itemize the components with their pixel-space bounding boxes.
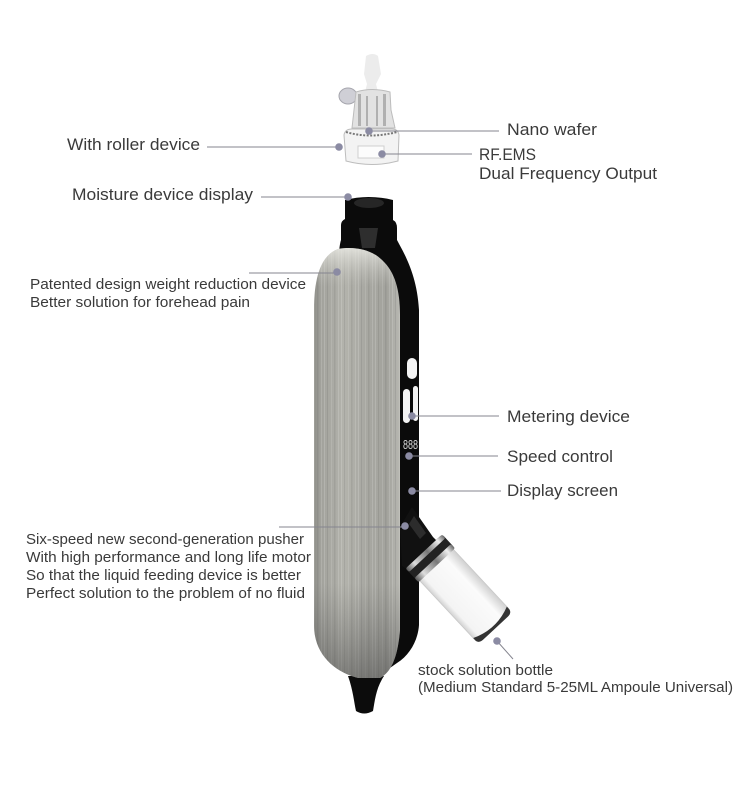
base window	[358, 146, 384, 158]
callout: metering device: Metering device	[507, 407, 630, 426]
roller	[339, 88, 357, 104]
callout: moisture device display: Moisture device display	[72, 185, 253, 204]
device: stock solution bottle	[400, 507, 514, 645]
vial base	[473, 607, 512, 644]
bottle neck	[400, 507, 446, 575]
device: metering buttons	[403, 386, 418, 423]
collar bands	[406, 534, 446, 572]
metal collar	[406, 534, 454, 582]
device: nozzle tip	[348, 676, 384, 714]
bottle assembly, rotated along axis	[406, 534, 514, 645]
callout: moisture device display	[72, 185, 352, 204]
callout: six-speed pusher: Six-speed new second-generation pusher	[26, 531, 304, 548]
neck highlight	[409, 516, 426, 539]
callout: six-speed pusher: With high performance and long life motor	[26, 549, 311, 566]
lower collar band	[414, 544, 455, 582]
base rim	[346, 132, 397, 136]
callout: metering device	[408, 407, 630, 426]
callout: six-speed pusher: So that the liquid feeding device is better	[26, 567, 301, 584]
callout: display screen	[408, 481, 618, 500]
device: main handle	[314, 197, 419, 714]
nozzle head with roller	[339, 54, 399, 164]
callout: RF.EMS: Dual Frequency Output	[479, 164, 657, 183]
device: silver cover	[314, 248, 400, 678]
callout: stock solution bottle	[418, 637, 733, 696]
device: top opening	[354, 198, 384, 208]
head cage	[352, 90, 395, 128]
glass vial	[417, 547, 511, 642]
callout: nano wafer: Nano wafer	[507, 120, 597, 139]
callout: six-speed pusher: Perfect solution to the problem of no fluid	[26, 585, 305, 602]
transparent base	[344, 129, 399, 164]
callout: with roller device	[67, 135, 343, 154]
callout: patented design	[30, 268, 341, 311]
callout: stock solution bottle: (Medium Standard 5-25ML Ampoule Universal)	[418, 679, 733, 696]
callout: RF.EMS	[378, 145, 657, 183]
device: white oval button	[407, 358, 417, 379]
callout: nano wafer	[365, 120, 597, 139]
callout: display screen: Display screen	[507, 481, 618, 500]
device: collar detail	[359, 228, 378, 248]
callout: stock solution bottle: stock solution bottle	[418, 662, 553, 679]
callout: speed control: Speed control	[507, 447, 613, 466]
device: digit display: 888	[403, 437, 418, 452]
callout: with roller device: With roller device	[67, 135, 200, 154]
callout: RF.EMS: RF.EMS	[479, 145, 536, 164]
cage ribs	[358, 94, 386, 126]
callout: patented design: Better solution for forehead pain	[30, 294, 250, 311]
device: black body shell	[339, 197, 419, 675]
callout: patented design: Patented design weight reduction device	[30, 276, 306, 293]
callout: speed control	[405, 447, 613, 466]
callout: six-speed pusher	[26, 522, 409, 602]
plunger	[364, 54, 381, 92]
